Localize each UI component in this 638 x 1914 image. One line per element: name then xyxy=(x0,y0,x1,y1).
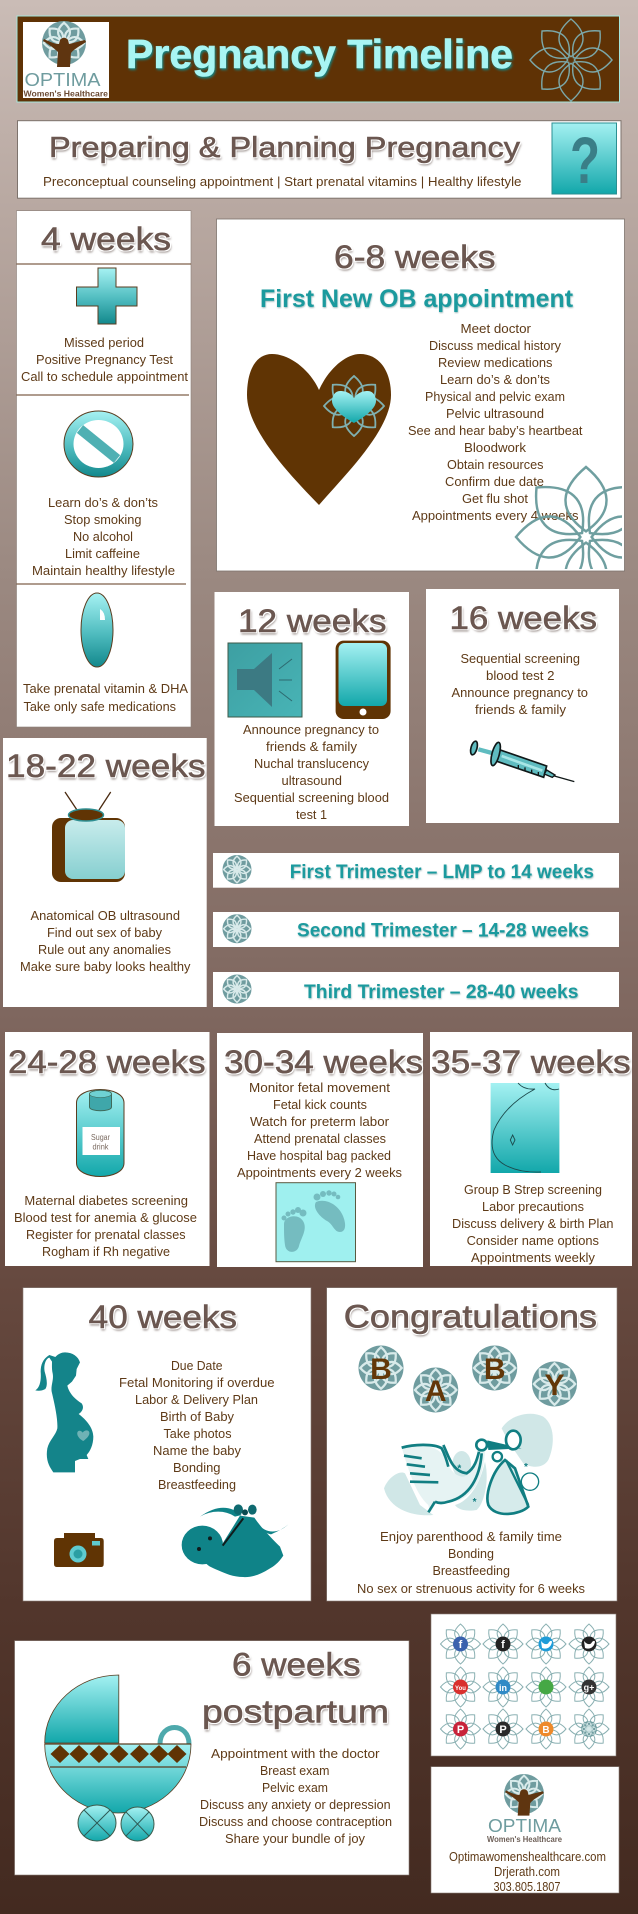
icon: brown heart with flower xyxy=(247,354,391,505)
panel: 30-34 weeks xyxy=(217,1033,423,1267)
text block: Monitor fetal movement xyxy=(249,1080,390,1095)
logo: Women's Healthcare xyxy=(487,1835,563,1844)
panel: social media icons xyxy=(431,1614,616,1756)
icon: baby footprints xyxy=(276,1183,356,1262)
text block: Appointment with the doctor xyxy=(211,1746,380,1761)
heading: 6-8 weeks xyxy=(334,239,496,275)
text block: Breast exam xyxy=(260,1763,330,1778)
icon: baby carriage xyxy=(45,1675,191,1841)
icon: speaker xyxy=(228,643,302,717)
contact details: Optimawomenshealthcare.com xyxy=(449,1849,606,1864)
heading: Preparing & Planning Pregnancy xyxy=(49,132,521,164)
icon: header flower xyxy=(530,19,612,101)
icon: medical cross xyxy=(76,268,137,324)
heading: Congratulations xyxy=(344,1299,597,1335)
text block: Appointments weekly xyxy=(471,1250,596,1265)
label: First Trimester – LMP to 14 weeks xyxy=(290,862,594,883)
icon: corner flower xyxy=(514,466,622,569)
text block: Breastfeeding xyxy=(158,1477,236,1492)
text: appointment list xyxy=(408,321,583,523)
text block: Find out sex of baby xyxy=(47,925,162,940)
logo xyxy=(487,1774,563,1844)
text: appointment list: Meet doctor xyxy=(460,321,532,336)
panel: 6-8 weeks xyxy=(216,218,625,572)
text: missed period xyxy=(21,335,188,384)
text block xyxy=(237,1080,402,1180)
panel: contact xyxy=(431,1767,619,1894)
contact details xyxy=(449,1849,606,1894)
text block: ultrasound xyxy=(282,773,342,788)
heading: 40 weeks xyxy=(89,1299,237,1335)
icon: sugar drink bottle xyxy=(76,1090,124,1176)
logo: Optima Women's Healthcare: Women's Healthcare xyxy=(24,88,108,98)
heading: postpartum xyxy=(202,1694,389,1730)
heading: 16 weeks xyxy=(450,600,597,636)
text block: blood test 2 xyxy=(486,668,554,683)
text: appointment list: See and hear baby’s heartbeat xyxy=(408,423,583,438)
icon: stork carrying baby xyxy=(384,1414,553,1515)
icon: stork carrying baby: * xyxy=(473,1497,477,1508)
text: appointment list: Appointments every 4 weeks xyxy=(412,508,579,523)
text block: friends & family xyxy=(475,702,566,717)
text block: Register for prenatal classes xyxy=(26,1227,186,1242)
text block: Enjoy parenthood & family time xyxy=(380,1529,562,1544)
panel: social media icons: f xyxy=(501,1639,505,1651)
text block: Consider name options xyxy=(467,1233,599,1248)
icon: sugar drink bottle: Sugar xyxy=(91,1133,110,1142)
header banner xyxy=(17,16,620,102)
text: vitamins: Take only safe medications xyxy=(24,699,176,714)
text: appointment list: Learn do’s & don’ts xyxy=(440,372,550,387)
panel: 4 weeks xyxy=(16,211,191,727)
heading: 4 weeks xyxy=(41,221,171,257)
text block: Discuss and choose contraception xyxy=(199,1814,392,1829)
panel: 24-28 weeks xyxy=(5,1032,210,1266)
subheading: First New OB appointment xyxy=(260,285,574,313)
icon: BABY rosettes xyxy=(358,1346,577,1412)
panel: congratulations xyxy=(327,1288,617,1601)
text block: Attend prenatal classes xyxy=(254,1131,386,1146)
text block: friends & family xyxy=(266,739,357,754)
text block: Have hospital bag packed xyxy=(247,1148,391,1163)
icon: rosette xyxy=(222,855,252,884)
icon: prohibited sign xyxy=(64,411,133,477)
icon: question mark: ? xyxy=(570,123,600,197)
panel: social media icons: g+ xyxy=(584,1682,594,1692)
icon: pregnant belly xyxy=(491,1083,559,1173)
icon: question mark xyxy=(552,123,616,197)
icon: sugar drink bottle: drink xyxy=(92,1142,109,1152)
panel: social media icons: in xyxy=(499,1683,507,1693)
text: do's and don'ts: No alcohol xyxy=(73,529,133,544)
text block: Due Date xyxy=(171,1358,222,1373)
text: do's and don'ts xyxy=(32,495,175,578)
heading: 30-34 weeks xyxy=(224,1044,423,1080)
text block: Fetal Monitoring if overdue xyxy=(119,1375,275,1390)
icon: pill xyxy=(81,593,113,667)
heading: 24-28 weeks xyxy=(8,1044,206,1080)
icon: camera xyxy=(54,1533,104,1567)
text: do's and don'ts: Limit caffeine xyxy=(65,546,140,561)
text: appointment list: Bloodwork xyxy=(464,440,527,455)
text block: Birth of Baby xyxy=(160,1409,234,1424)
text: appointment list: Review medications xyxy=(438,355,553,370)
banner: third trimester xyxy=(213,972,619,1007)
text block: Breastfeeding xyxy=(432,1563,510,1578)
panel: social media icons: B xyxy=(542,1725,550,1736)
text block xyxy=(452,651,588,717)
heading: 18-22 weeks xyxy=(6,748,206,784)
text block: Name the baby xyxy=(153,1443,241,1458)
text: appointment list: Obtain resources xyxy=(447,457,544,472)
text block xyxy=(199,1746,392,1846)
logo: Optima Women's Healthcare xyxy=(23,21,109,98)
contact details: 303.805.1807 xyxy=(494,1879,560,1894)
panel: 18-22 weeks xyxy=(3,738,207,1007)
text block: Bonding xyxy=(448,1546,494,1561)
text block: Watch for preterm labor xyxy=(250,1114,390,1129)
text block xyxy=(14,1193,197,1259)
text block: test 1 xyxy=(296,807,327,822)
text block: Discuss delivery & birth Plan xyxy=(452,1216,614,1231)
text block: Appointments every 2 weeks xyxy=(237,1165,402,1180)
icon: BABY rosettes: B xyxy=(484,1353,506,1386)
text block xyxy=(452,1182,614,1265)
text block: Make sure baby looks healthy xyxy=(20,959,191,974)
label: Third Trimester – 28-40 weeks xyxy=(304,982,578,1003)
text: missed period: Call to schedule appointment xyxy=(21,369,188,384)
panel: 40 weeks xyxy=(23,1288,311,1601)
text: do's and don'ts: Maintain healthy lifestyle xyxy=(32,563,175,578)
icon: pregnant silhouette xyxy=(35,1352,93,1472)
text block: Discuss any anxiety or depression xyxy=(200,1797,391,1812)
text block: Bonding xyxy=(173,1460,220,1475)
text: missed period: Positive Pregnancy Test xyxy=(36,352,173,367)
icon: stork carrying baby: * xyxy=(457,1464,461,1475)
panel: 6 weeks postpartum xyxy=(15,1641,409,1875)
label: Second Trimester – 14-28 weeks xyxy=(297,921,589,942)
text: do's and don'ts: Learn do’s & don’ts xyxy=(48,495,158,510)
text block: Preconceptual counseling appointment | Start prenatal vitamins | Healthy lifestyle xyxy=(43,174,522,189)
text: missed period: Missed period xyxy=(64,335,144,350)
text: appointment list: Get flu shot xyxy=(462,491,528,506)
icon: television xyxy=(52,792,125,882)
logo: Optima Women's Healthcare: OPTIMA xyxy=(24,70,100,90)
text: vitamins xyxy=(23,681,188,714)
panel: social media icons: You xyxy=(455,1686,466,1692)
text: appointment list: Confirm due date xyxy=(445,474,544,489)
banner: second trimester xyxy=(213,912,619,947)
text block: Announce pregnancy to xyxy=(452,685,588,700)
text block xyxy=(20,908,191,974)
text block: Labor & Delivery Plan xyxy=(135,1392,258,1407)
text block: Group B Strep screening xyxy=(464,1182,602,1197)
text block: Rogham if Rh negative xyxy=(42,1244,170,1259)
text block: Pelvic exam xyxy=(262,1780,328,1795)
heading: 12 weeks xyxy=(238,603,386,639)
banner: first trimester xyxy=(213,853,619,888)
heading: 35-37 weeks xyxy=(431,1044,631,1080)
panel: social media icons: P xyxy=(499,1724,507,1736)
panel: social media icons: f xyxy=(459,1639,463,1651)
icon: BABY rosettes: Y xyxy=(544,1369,565,1402)
text: appointment list: Physical and pelvic exam xyxy=(425,389,565,404)
text block: Labor precautions xyxy=(482,1199,584,1214)
icon: syringe xyxy=(469,740,574,782)
icon: rosette xyxy=(222,914,252,943)
logo: OPTIMA xyxy=(488,1816,561,1836)
text block: Sequential screening blood xyxy=(234,790,389,805)
text block xyxy=(234,722,389,822)
icon: BABY rosettes: A xyxy=(425,1375,447,1408)
icon: swaddled baby xyxy=(182,1504,288,1577)
heading: 6 weeks xyxy=(232,1647,360,1683)
panel: 16 weeks xyxy=(426,589,619,823)
title: Pregnancy Timeline xyxy=(126,31,513,77)
text: appointment list: Pelvic ultrasound xyxy=(446,406,544,421)
text block xyxy=(357,1529,585,1596)
contact details: Drjerath.com xyxy=(494,1864,560,1879)
panel: 35-37 weeks xyxy=(430,1032,632,1266)
text: appointment list: Discuss medical history xyxy=(429,338,561,353)
icon: stork carrying baby: * xyxy=(524,1462,528,1473)
text block: Blood test for anemia & glucose xyxy=(14,1210,197,1225)
panel: social media icons: P xyxy=(457,1724,464,1736)
icon: rosette xyxy=(222,974,252,1004)
text block: Fetal kick counts xyxy=(273,1097,367,1112)
text block: Take photos xyxy=(164,1426,232,1441)
text block: No sex or strenuous activity for 6 weeks xyxy=(357,1581,585,1596)
icon: phone xyxy=(336,641,391,719)
text block xyxy=(119,1358,275,1492)
text block: Anatomical OB ultrasound xyxy=(30,908,180,923)
text block: Share your bundle of joy xyxy=(225,1831,365,1846)
icon: BABY rosettes: B xyxy=(370,1353,392,1386)
text: do's and don'ts: Stop smoking xyxy=(64,512,142,527)
text block: Sequential screening xyxy=(460,651,580,666)
text block: Rule out any anomalies xyxy=(38,942,171,957)
panel: preparing and planning xyxy=(18,121,621,198)
text block: Nuchal translucency xyxy=(254,756,369,771)
text block: Announce pregnancy to xyxy=(243,722,379,737)
panel: 12 weeks xyxy=(214,592,409,826)
text: vitamins: Take prenatal vitamin & DHA xyxy=(23,681,188,696)
text block: Maternal diabetes screening xyxy=(24,1193,188,1208)
heading xyxy=(202,1647,389,1730)
